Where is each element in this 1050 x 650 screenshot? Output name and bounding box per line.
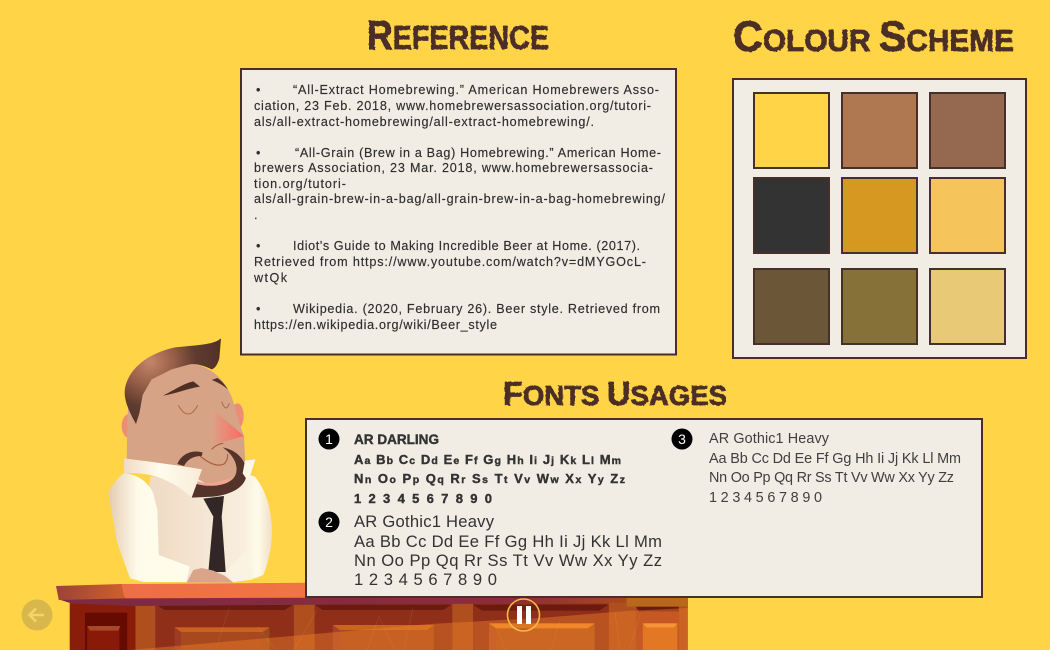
heading: Reference: REFERENCE bbox=[367, 12, 549, 58]
desk bbox=[56, 581, 688, 650]
panel: fonts usages bbox=[306, 419, 982, 597]
illustration: bartender character bbox=[108, 338, 272, 583]
reference 2: tion.org/tutori- bbox=[254, 177, 346, 191]
font sample 2: 1 2 3 4 5 6 7 8 9 0 bbox=[354, 570, 497, 589]
character shirt bbox=[143, 473, 272, 582]
reference 4: Wikipedia. (2020, February 26). Beer style. Retrieved from bbox=[293, 302, 660, 316]
font sample 2 bbox=[318, 512, 662, 589]
reference 3: wtQk bbox=[253, 271, 288, 285]
panel: colour swatches bbox=[733, 79, 1026, 358]
reference 2: “All-Grain (Brew in a Bag) Homebrewing.” American Home- bbox=[295, 146, 661, 160]
desk panel shadows bbox=[156, 605, 679, 611]
desk right cap bbox=[627, 596, 688, 607]
font sample 1: Aa Bb Cc Dd Ee Ff Gg Hh Ii Jj Kk Ll Mm bbox=[354, 452, 621, 467]
desk dark band bbox=[59, 596, 627, 606]
font sample 3: AR Gothic1 Heavy bbox=[709, 431, 830, 447]
character nose bbox=[212, 408, 244, 445]
character eyebrows bbox=[163, 378, 228, 396]
character collar bbox=[124, 458, 255, 498]
heading: Colour Scheme: COLOUR SCHEME bbox=[733, 13, 1014, 61]
desk panels bbox=[155, 603, 679, 650]
font sample 1 bbox=[318, 428, 625, 506]
reference 2: als/all-grain-brew-in-a-bag/all-grain-brew-in-a-bag-homebrewing/ bbox=[254, 192, 666, 206]
reference 2: . bbox=[254, 208, 258, 222]
character chin bbox=[195, 477, 233, 490]
font sample 3: Aa Bb Cc Dd Ee Ff Gg Hh Ii Jj Kk Ll Mm bbox=[709, 451, 961, 467]
character tie bbox=[203, 496, 226, 572]
reference 1: • bbox=[256, 83, 260, 97]
character hands bbox=[187, 568, 233, 583]
reference 4 bbox=[254, 302, 660, 332]
reference 1: als/all-extract-homebrewing/all-extract-homebrewing/. bbox=[254, 115, 594, 129]
desk left recess bbox=[70, 603, 135, 650]
font sample 2: AR Gothic1 Heavy bbox=[354, 512, 495, 531]
font sample 3: Nn Oo Pp Qq Rr Ss Tt Vv Ww Xx Yy Zz bbox=[709, 470, 954, 486]
icon: back arrow button bbox=[22, 600, 52, 630]
reference 4: • bbox=[256, 302, 260, 316]
font sample 3: 3 bbox=[678, 431, 686, 447]
character closed eyes bbox=[178, 402, 229, 414]
reference 1: “All-Extract Homebrewing.” American Homebrewers Asso- bbox=[293, 83, 659, 97]
reference 2 bbox=[254, 146, 666, 222]
reference 4: https://en.wikipedia.org/wiki/Beer_style bbox=[254, 318, 497, 332]
desk raised panels bbox=[174, 623, 677, 650]
swatch grid bbox=[754, 93, 1005, 344]
desk wood streaks bbox=[216, 607, 641, 650]
font sample 3: 1 2 3 4 5 6 7 8 9 0 bbox=[709, 490, 822, 506]
desk top side bbox=[56, 584, 125, 600]
font sample 2: Aa Bb Cc Dd Ee Ff Gg Hh Ii Jj Kk Ll Mm bbox=[354, 532, 662, 551]
font sample 2: 2 bbox=[325, 514, 333, 530]
character hair bbox=[125, 338, 221, 424]
reference 1: ciation, 23 Feb. 2018, www.homebrewersassociation.org/tutori- bbox=[254, 99, 651, 113]
reference 3: • bbox=[256, 239, 260, 253]
reference 3: Idiot's Guide to Making Incredible Beer at Home. (2017). bbox=[293, 239, 640, 253]
desk top surface bbox=[122, 581, 634, 598]
desk light beam bbox=[130, 608, 688, 650]
reference 1 bbox=[254, 83, 659, 129]
desk base bbox=[70, 598, 688, 650]
character ears bbox=[122, 403, 244, 438]
panel: reference list bbox=[241, 69, 676, 354]
character right sleeve fold bbox=[225, 550, 253, 582]
icon: pause button bbox=[508, 599, 540, 631]
reference 2: brewers Association, 23 Mar. 2018, www.homebrewersassocia- bbox=[254, 161, 653, 175]
reference 2: • bbox=[256, 146, 260, 160]
character nostril and mouth bbox=[200, 443, 228, 465]
reference 3: Retrieved from https://www.youtube.com/watch?v=dMYGOcL- bbox=[254, 255, 646, 269]
font sample 1: 1 bbox=[325, 431, 333, 447]
font sample 1: 1 2 3 4 5 6 7 8 9 0 bbox=[354, 491, 492, 506]
font sample 1: AR DARLING bbox=[354, 432, 439, 447]
font sample 3 bbox=[672, 428, 961, 506]
font sample 1: Nn Oo Pp Qq Rr Ss Tt Vv Ww Xx Yy Zz bbox=[354, 471, 625, 486]
character left sleeve bbox=[108, 473, 190, 582]
heading: Fonts Usages: FONTS USAGES bbox=[503, 375, 727, 412]
reference 3 bbox=[253, 239, 646, 285]
character head bbox=[127, 363, 245, 486]
character beard bbox=[177, 447, 247, 498]
font sample 2: Nn Oo Pp Qq Rr Ss Tt Vv Ww Xx Yy Zz bbox=[354, 551, 662, 570]
